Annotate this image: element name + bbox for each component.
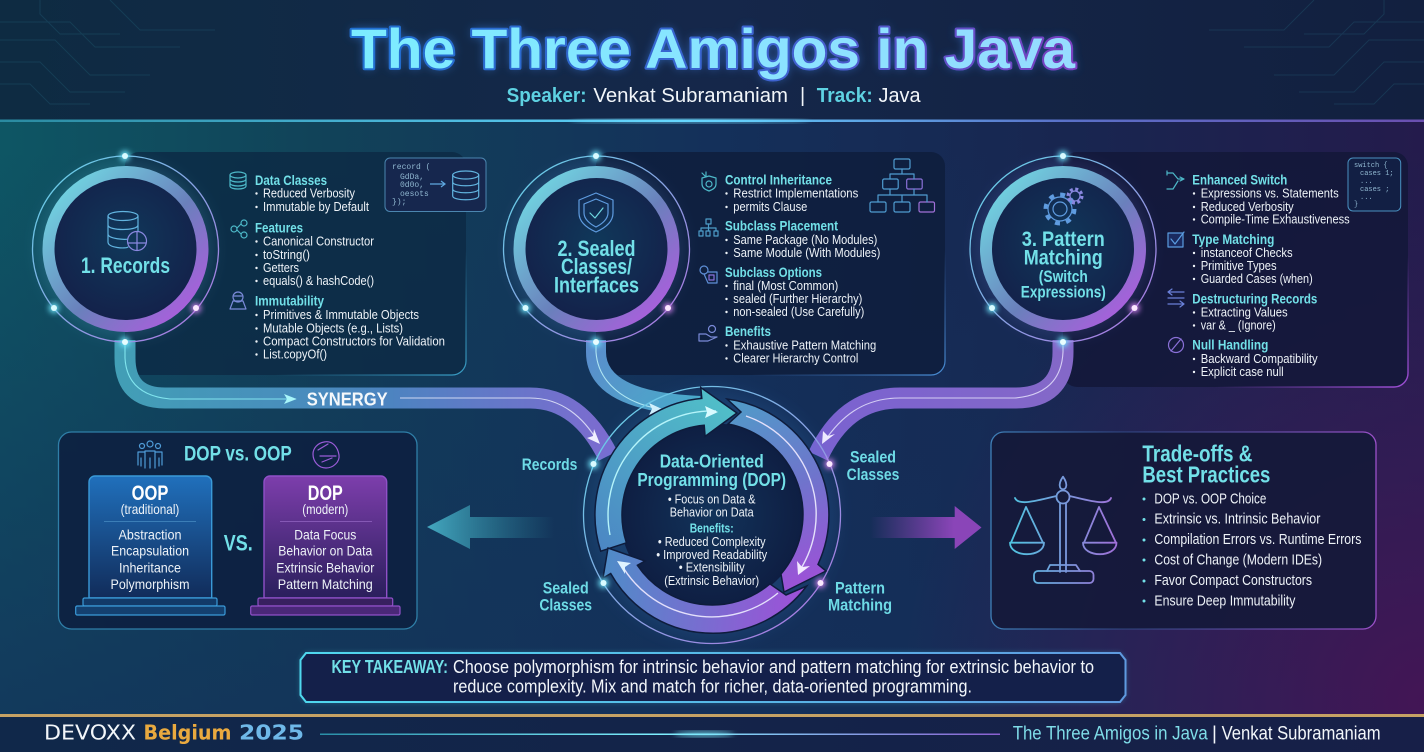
icon: database xyxy=(108,212,146,250)
text: control inheritance xyxy=(725,172,859,214)
text: DOP centre: • Focus on Data & xyxy=(668,491,756,506)
mini code card: switch: ... xyxy=(1360,194,1373,202)
text: enhanced switch: Compile-Time Exhaustiveness xyxy=(1201,212,1350,227)
heading: 2. Sealed Classes/Interfaces xyxy=(554,236,639,297)
text: benefits: Clearer Hierarchy Control xyxy=(733,351,858,366)
icon: enhanced switch xyxy=(1167,171,1184,189)
text: DOP centre: Behavior on Data xyxy=(670,505,754,520)
label: Sealed Classes left: Classes xyxy=(539,596,592,615)
card: OOP xyxy=(76,476,225,615)
icon: control inheritance xyxy=(702,172,716,191)
text: type matching: instanceof Checks xyxy=(1201,245,1293,260)
icon: null handling xyxy=(1168,338,1184,352)
label: Sealed Classes right: Sealed xyxy=(850,448,896,467)
text: immutability: Immutability xyxy=(255,293,324,309)
card: OOP: Inheritance xyxy=(119,559,181,575)
label: Records: Records xyxy=(522,455,577,474)
label: Pattern Matching: Pattern xyxy=(835,578,885,597)
heading: 3. Pattern Matching (Switch Expressions): Expressions) xyxy=(1021,283,1106,302)
footer: talk title and speaker: Venkat Subramaniam xyxy=(1222,723,1381,744)
title: The Three Amigos in Java xyxy=(351,17,1076,80)
footer: talk title and speaker xyxy=(1013,723,1381,744)
heading: 2. Sealed Classes/Interfaces: Interfaces xyxy=(554,272,639,297)
text: features: Canonical Constructor xyxy=(263,234,375,249)
heading: 2. Sealed Classes/Interfaces: Classes/ xyxy=(561,254,632,279)
label: VS.: VS. xyxy=(224,531,253,556)
icon: features xyxy=(231,220,247,238)
icon: data classes xyxy=(230,172,246,189)
text: subclass placement: Same Module (With Modules) xyxy=(733,245,880,260)
ribbon: pattern matching to DOP cycle xyxy=(818,340,1063,456)
panel: trade-offs and best practices xyxy=(991,432,1376,629)
text: subclass placement xyxy=(725,218,880,260)
text: features: toString() xyxy=(263,247,310,262)
card: OOP: Encapsulation xyxy=(111,543,189,559)
panel: sealed classes details xyxy=(596,152,945,375)
ribbon: sealed classes to DOP cycle xyxy=(596,340,700,415)
heading: trade-offs xyxy=(1142,441,1270,487)
text: subclass options: non-sealed (Use Carefully) xyxy=(733,304,864,319)
text: DOP centre: Data-Oriented xyxy=(660,452,764,472)
text: DOP centre: • Reduced Complexity xyxy=(658,534,766,549)
mini code card: record: oesots xyxy=(400,190,429,199)
text: features: equals() & hashCode() xyxy=(263,273,374,288)
text: destructuring records: Extracting Values xyxy=(1201,305,1288,320)
card: DOP: DOP xyxy=(308,482,343,505)
callout: key takeaway xyxy=(300,653,1126,702)
icon: people xyxy=(138,441,162,468)
text: type matching: Primitive Types xyxy=(1201,258,1277,273)
text: DOP centre: Programming (DOP) xyxy=(637,470,786,490)
mini code card: switch: ... xyxy=(1360,178,1373,186)
DOP cycle xyxy=(522,386,899,644)
text: type matching: Type Matching xyxy=(1192,231,1274,247)
text: enhanced switch: Reduced Verbosity xyxy=(1201,199,1294,214)
subtitle: speaker and track: Venkat Subramaniam xyxy=(593,85,788,107)
card: DOP: Pattern Matching xyxy=(278,576,373,592)
label: synergy: SYNERGY xyxy=(307,390,388,410)
ribbon: records to DOP cycle xyxy=(125,340,608,456)
text: null handling xyxy=(1192,337,1318,379)
text: control inheritance: Control Inheritance xyxy=(725,172,832,188)
arrow: cycle violet xyxy=(727,399,829,592)
icon: subclass options xyxy=(700,266,717,283)
text: null handling: Backward Compatibility xyxy=(1201,351,1318,366)
list: best practices xyxy=(1142,491,1361,609)
card: DOP: Behavior on Data xyxy=(278,543,372,559)
callout: key takeaway: KEY TAKEAWAY: xyxy=(332,657,448,677)
text: benefits xyxy=(725,323,876,366)
heading: 2. Sealed Classes/Interfaces: 2. Sealed xyxy=(558,236,636,261)
card: DOP: (modern) xyxy=(302,501,348,517)
subtitle: speaker and track: | xyxy=(800,85,805,107)
label: Pattern Matching: Matching xyxy=(828,596,892,615)
text: type matching xyxy=(1192,231,1313,286)
text: immutability: List.copyOf() xyxy=(263,347,327,362)
icon: type matching xyxy=(1168,232,1184,247)
callout: key takeaway: Choose polymorphism for intrinsic behavior and pattern matching for extrinsic behavior to xyxy=(453,657,1094,677)
node: sealed classes circle xyxy=(504,151,690,347)
text: subclass options: final (Most Common) xyxy=(733,278,838,293)
mini code card: switch: cases ; xyxy=(1360,186,1389,194)
text: subclass placement: Same Package (No Modules) xyxy=(733,232,877,247)
text: features: Getters xyxy=(263,260,299,275)
icon: benefits xyxy=(699,326,717,341)
text: DOP centre: Benefits: xyxy=(690,521,734,536)
subtitle: speaker and track: Speaker: xyxy=(507,85,587,107)
text: data classes: Reduced Verbosity xyxy=(263,186,355,201)
text: null handling: Explicit case null xyxy=(1201,364,1284,379)
card: OOP: (traditional) xyxy=(121,501,179,517)
label: Sealed Classes right: Classes xyxy=(847,465,899,484)
text: benefits: Exhaustive Pattern Matching xyxy=(733,338,876,353)
mini code card: record xyxy=(385,158,486,212)
text: subclass options: Subclass Options xyxy=(725,264,822,280)
footer: talk title and speaker: | xyxy=(1212,723,1217,744)
callout: key takeaway: reduce complexity. Mix and match for richer, data-oriented programming. xyxy=(453,677,972,697)
arrow: cycle cyan xyxy=(595,388,737,551)
list: best practices: Favor Compact Constructors xyxy=(1154,573,1312,589)
text: destructuring records xyxy=(1192,291,1317,333)
mini code card: record: }); xyxy=(392,198,406,207)
list: best practices: DOP vs. OOP Choice xyxy=(1154,491,1266,507)
text: DOP centre: • Extensibility xyxy=(679,560,745,575)
node: records circle xyxy=(32,151,218,347)
text: data classes: Data Classes xyxy=(255,172,327,188)
text: immutability: Primitives & Immutable Objects xyxy=(263,307,419,322)
heading: 3. Pattern Matching (Switch Expressions): Matching xyxy=(1024,247,1103,270)
mini code card: switch: } xyxy=(1354,201,1358,209)
footer: event brand: DEVOXX xyxy=(44,720,136,744)
heading: 3. Pattern Matching (Switch Expressions) xyxy=(1021,228,1106,302)
text: enhanced switch: Enhanced Switch xyxy=(1192,172,1287,188)
text: immutability xyxy=(255,293,445,362)
card: OOP: OOP xyxy=(132,482,168,505)
text: enhanced switch xyxy=(1192,172,1350,227)
heading: 1. Records: 1. Records xyxy=(81,253,170,278)
list: best practices: Cost of Change (Modern IDEs) xyxy=(1154,552,1322,568)
panel: pattern matching details xyxy=(1063,152,1408,387)
text: destructuring records: var & _ (Ignore) xyxy=(1201,318,1276,333)
card: OOP: Abstraction xyxy=(118,526,182,542)
text: subclass options: sealed (Further Hierarchy) xyxy=(733,291,862,306)
text: control inheritance: Restrict Implementations xyxy=(733,186,859,201)
icon: shield xyxy=(579,193,613,232)
cycle node dots xyxy=(588,459,834,588)
mini code card: switch: switch { xyxy=(1354,162,1388,170)
text: DOP centre: (Extrinsic Behavior) xyxy=(664,573,759,588)
card: DOP: Data Focus xyxy=(294,526,356,542)
list: best practices: Extrinsic vs. Intrinsic Behavior xyxy=(1154,512,1321,528)
text: DOP centre xyxy=(637,452,786,588)
mini code card: record: 0d0o, xyxy=(400,181,424,190)
mini code card: switch xyxy=(1348,158,1401,211)
text: null handling: Null Handling xyxy=(1192,337,1268,353)
arrow: left from DOP to comparison xyxy=(427,505,555,549)
text: subclass options xyxy=(725,264,864,319)
title: The Three Amigos in Java xyxy=(351,17,1076,80)
icon: balance scale xyxy=(1010,477,1116,583)
subtitle: speaker and track xyxy=(507,85,921,107)
text: data classes xyxy=(255,172,369,214)
icon: class hierarchy tree xyxy=(870,159,934,212)
heading: trade-offs: Trade-offs & xyxy=(1142,441,1252,467)
text: control inheritance: permits Clause xyxy=(733,199,807,214)
text: destructuring records: Destructuring Records xyxy=(1192,291,1317,307)
text: benefits: Benefits xyxy=(725,323,771,339)
list: best practices: Compilation Errors vs. Runtime Errors xyxy=(1154,532,1361,548)
text: data classes: Immutable by Default xyxy=(263,199,369,214)
text: DOP centre: • Improved Readability xyxy=(656,547,768,562)
icon: gears xyxy=(1046,189,1082,224)
panel: records details xyxy=(125,152,486,375)
subtitle: speaker and track: Track: xyxy=(817,85,873,107)
footer: talk title and speaker: The Three Amigos in Java xyxy=(1013,723,1208,744)
subtitle: speaker and track: Java xyxy=(878,85,921,107)
icon: brain xyxy=(313,442,339,468)
text: enhanced switch: Expressions vs. Statements xyxy=(1201,186,1339,201)
label: Sealed Classes right xyxy=(847,448,899,484)
card: DOP: Extrinsic Behavior xyxy=(276,559,375,575)
text: features xyxy=(255,220,375,288)
heading: DOP vs. OOP: DOP vs. OOP xyxy=(184,443,292,466)
arrow: right from DOP to trade-offs xyxy=(870,506,982,549)
icon: subclass placement xyxy=(699,219,718,236)
footer: event brand: Belgium xyxy=(144,720,232,744)
heading: trade-offs: Best Practices xyxy=(1142,461,1270,487)
label: Sealed Classes left xyxy=(539,578,592,615)
mini code card: switch: cases 1; xyxy=(1360,170,1394,178)
list: best practices: Ensure Deep Immutability xyxy=(1154,593,1296,609)
footer: event brand: 2025 xyxy=(239,720,304,744)
text: subclass placement: Subclass Placement xyxy=(725,218,838,234)
node: pattern matching circle xyxy=(970,151,1156,347)
heading: 3. Pattern Matching (Switch Expressions): (Switch xyxy=(1039,267,1088,286)
label: Sealed Classes left: Sealed xyxy=(543,578,589,597)
card: DOP xyxy=(251,476,400,615)
panel: DOP vs OOP xyxy=(58,432,417,629)
card: OOP: Polymorphism xyxy=(110,576,190,592)
icon: destructuring records xyxy=(1168,289,1184,307)
mini code card: record: GdDa, xyxy=(400,173,424,182)
icon: immutability xyxy=(230,292,246,309)
text: features: Features xyxy=(255,220,303,236)
text: type matching: Guarded Cases (when) xyxy=(1201,271,1313,286)
mini code card: record: record ( xyxy=(392,163,430,172)
text: immutability: Mutable Objects (e.g., Lists) xyxy=(263,321,403,336)
text: immutability: Compact Constructors for Validation xyxy=(263,334,445,349)
heading: 3. Pattern Matching (Switch Expressions): 3. Pattern xyxy=(1022,228,1105,251)
arrow: cycle purple xyxy=(603,548,807,633)
label: Pattern Matching xyxy=(828,578,892,615)
footer: event brand xyxy=(44,720,304,744)
